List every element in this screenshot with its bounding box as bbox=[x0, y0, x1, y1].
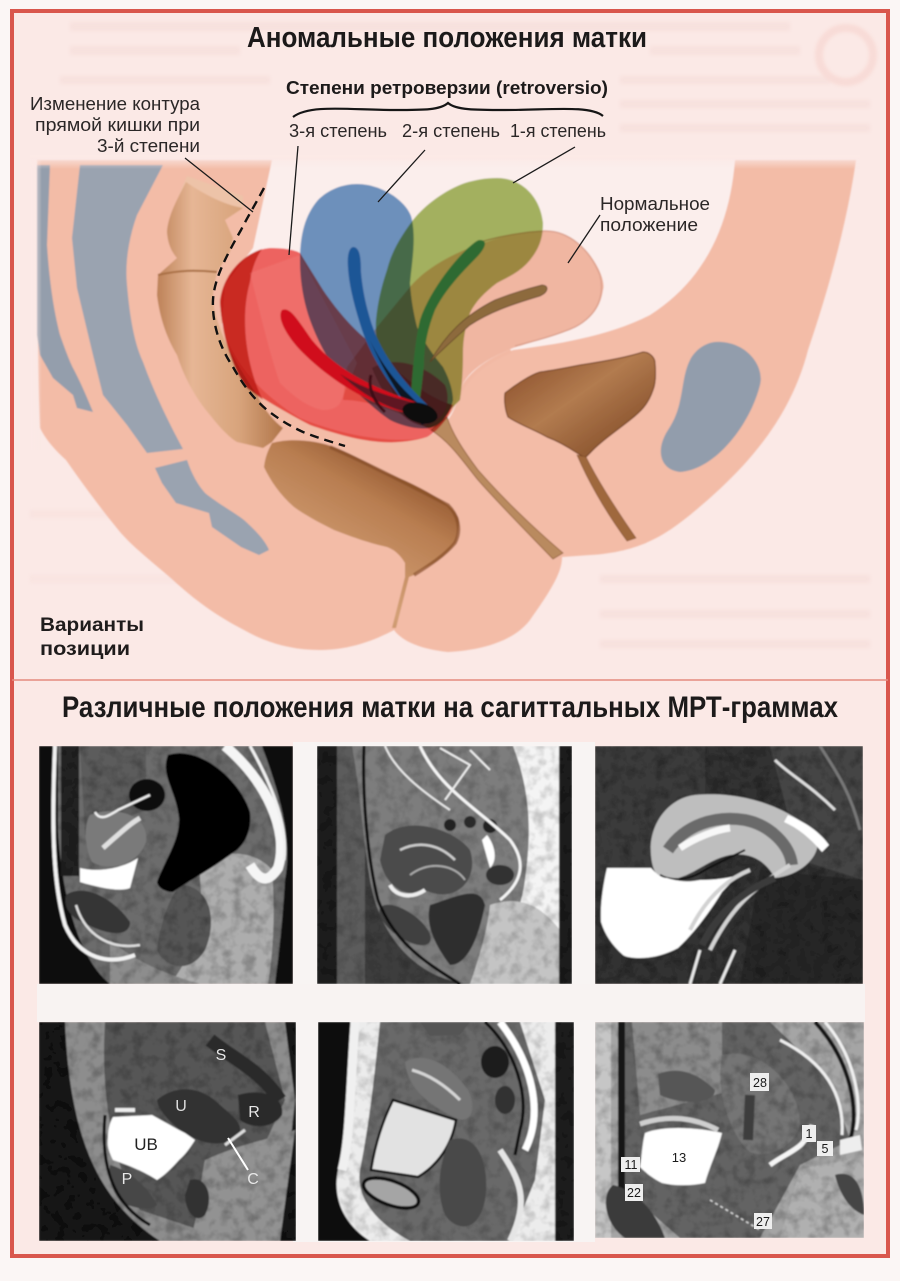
rectum upper segment bbox=[157, 182, 283, 448]
numbered callouts: 1 bbox=[806, 1127, 813, 1141]
label: position variants: позиции bbox=[40, 639, 130, 660]
MRI panel 4 bbox=[39, 1022, 296, 1241]
label: normal position: положение bbox=[600, 215, 698, 235]
leader: 1st degree bbox=[513, 147, 575, 183]
fade at top of illustration bbox=[30, 155, 860, 169]
urethra bbox=[577, 455, 636, 541]
label: change of rectal contour: 3-й степени bbox=[97, 135, 200, 156]
dashed rectal contour at 3rd degree bbox=[213, 188, 345, 446]
MRI panel 3 bbox=[595, 746, 863, 984]
title: Аномальные положения матки bbox=[247, 22, 647, 54]
numbered callouts: 13 bbox=[672, 1150, 686, 1165]
anatomical labels: P bbox=[122, 1171, 132, 1188]
MRI panel 2 bbox=[317, 746, 572, 984]
label: 2nd degree: 2-я степень bbox=[402, 121, 500, 141]
seam between uterus and body bbox=[459, 351, 511, 395]
dark core at cervix bbox=[372, 362, 448, 426]
label: normal position: Нормальное bbox=[600, 194, 710, 214]
uterine cavity: second degree bbox=[348, 247, 435, 422]
anatomical labels: U bbox=[175, 1098, 187, 1115]
MRI backing strip bbox=[293, 742, 595, 988]
numbered callouts: 28 bbox=[753, 1076, 767, 1090]
leader: 2nd degree bbox=[378, 150, 425, 202]
numbered callouts: 11 bbox=[625, 1158, 638, 1172]
leader: rectal contour bbox=[185, 158, 253, 212]
label: 3rd degree: 3-я степень bbox=[289, 121, 387, 141]
third degree red lobe bbox=[220, 248, 453, 442]
brace bbox=[293, 103, 603, 117]
first degree green lobe bbox=[376, 178, 543, 428]
lower gray band bbox=[155, 460, 269, 555]
divider between sections bbox=[12, 679, 888, 681]
heading: degrees of retroversion: Степени ретроверзии (retroversio) bbox=[286, 77, 608, 98]
MRI panel 5 bbox=[318, 1022, 574, 1241]
anatomical labels: C bbox=[247, 1171, 259, 1188]
uterine cavity: first degree bbox=[410, 240, 485, 410]
arrow to cervix bbox=[228, 1138, 248, 1170]
anatomical diagram bbox=[30, 155, 860, 652]
far-left gray band bbox=[37, 165, 93, 412]
rectum upper tan cap bbox=[175, 176, 243, 220]
normal position uterus bbox=[343, 231, 604, 430]
numbered callouts: 22 bbox=[627, 1186, 641, 1200]
label: change of rectal contour: Изменение контура bbox=[30, 93, 201, 114]
numbered callouts bbox=[621, 1073, 833, 1229]
cervix dark point bbox=[400, 399, 440, 427]
label: change of rectal contour: прямой кишки при bbox=[35, 114, 200, 135]
vagina canal bbox=[431, 417, 563, 559]
second degree blue lobe bbox=[300, 184, 453, 428]
body silhouette bbox=[37, 160, 856, 652]
right gray blob bbox=[661, 342, 761, 472]
label: 1st degree: 1-я степень bbox=[510, 121, 606, 141]
peritoneal cavity bbox=[222, 160, 735, 440]
sacral gray band bbox=[72, 165, 183, 453]
fade at left of illustration bbox=[30, 160, 42, 450]
uterine cavity: third degree bbox=[280, 309, 430, 416]
leader: 3rd degree bbox=[289, 146, 298, 255]
normal uterus fundus outline bbox=[477, 231, 602, 346]
rectum lower brown segment bbox=[264, 440, 459, 628]
MRI panel 1 bbox=[39, 746, 293, 984]
MRI panel 6 bbox=[595, 1022, 864, 1238]
anatomical labels bbox=[122, 1047, 260, 1188]
label: position variants: Варианты bbox=[40, 615, 144, 636]
numbered callouts: 27 bbox=[756, 1215, 770, 1229]
anatomical labels: R bbox=[248, 1104, 260, 1121]
anatomical labels: S bbox=[216, 1047, 226, 1064]
leader: normal position bbox=[568, 215, 600, 263]
numbered callouts: 5 bbox=[822, 1142, 829, 1156]
uterine cavity: normal bbox=[430, 285, 547, 362]
anatomical labels: UB bbox=[134, 1135, 158, 1154]
bladder bbox=[505, 352, 655, 458]
